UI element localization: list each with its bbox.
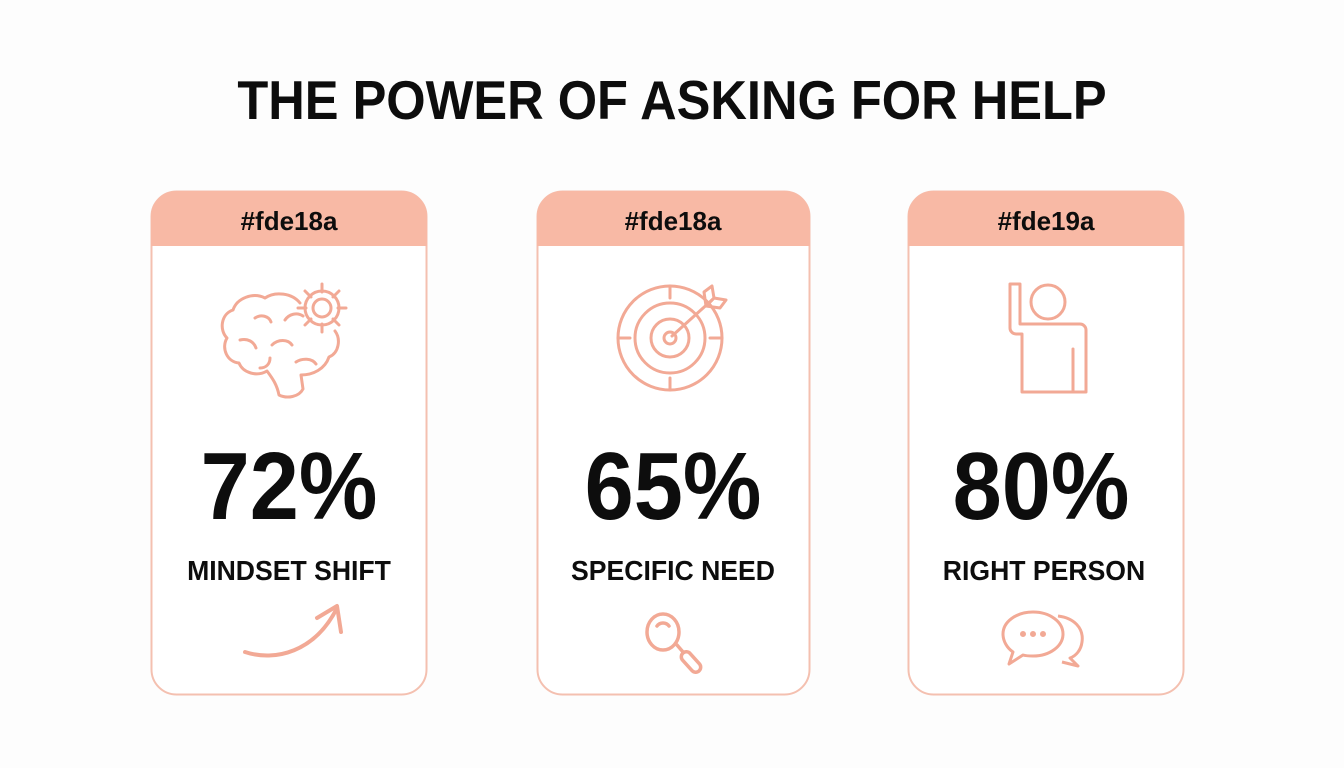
panel: mindset shift [151,191,427,694]
icon: target with arrow [618,286,726,390]
label: MINDSET SHIFT [187,554,391,586]
label: SPECIFIC NEED [571,554,775,586]
panel: right person [908,191,1184,694]
header label: #fde19a [998,206,1095,236]
icon: brain with gear [222,284,346,397]
panel: specific need [537,191,810,694]
icon: chat bubbles [1003,612,1082,666]
title: THE POWER OF ASKING FOR HELP [237,70,1107,131]
icon: rising arrow [245,606,341,656]
icon: person raising hand [1010,284,1086,392]
header label: #fde18a [241,206,338,236]
stat: 65% [585,433,761,540]
stat: 80% [953,433,1129,540]
stat: 72% [201,433,377,540]
label: RIGHT PERSON [943,554,1145,586]
header label: #fde18a [625,206,722,236]
icon: magnifier [647,614,703,674]
